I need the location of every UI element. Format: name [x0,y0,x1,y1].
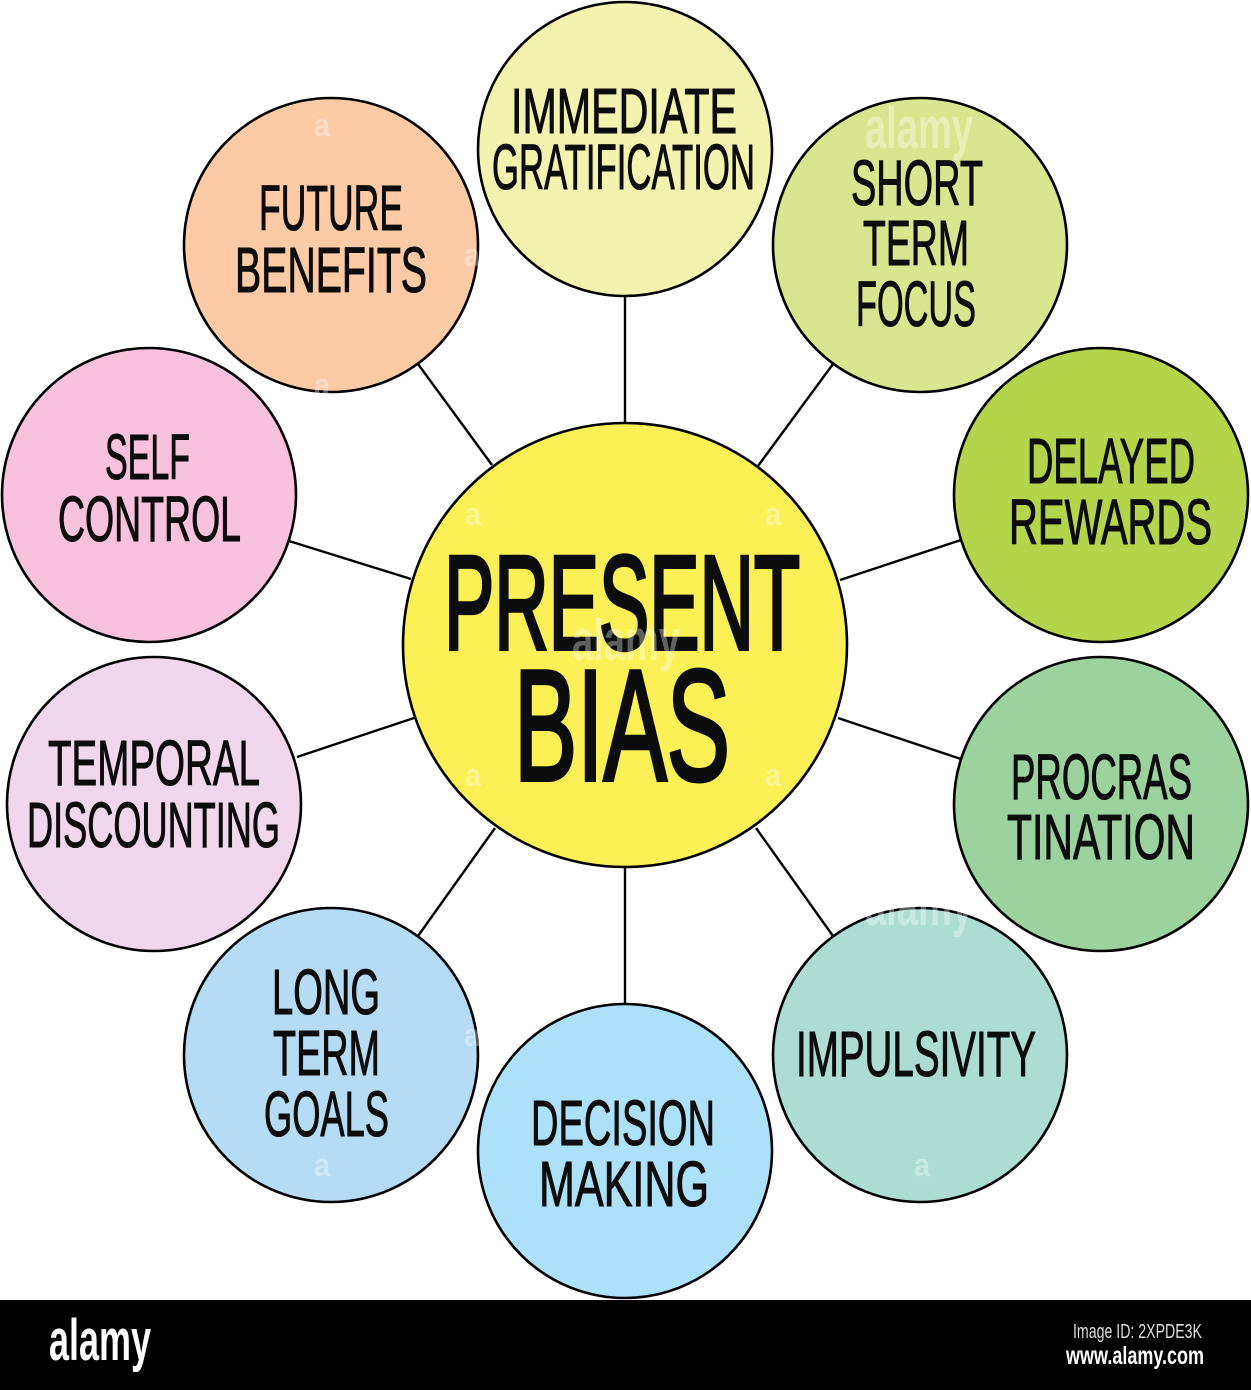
node: self control: SELF [105,421,190,493]
footer bar [0,1300,1251,1390]
watermarks: a [765,496,781,532]
central node: present bias [403,423,847,867]
watermarks: alamy [865,873,973,938]
node: long term goals: TERM [273,1017,380,1089]
watermarks: alamy [865,96,973,161]
node: self control: CONTROL [58,483,241,555]
node: procrastination [954,657,1248,951]
node: delayed rewards [954,348,1248,642]
node: short term focus: FOCUS [856,268,976,340]
node: temporal discounting [7,657,301,951]
node: decision making: DECISION [531,1087,715,1159]
node: temporal discounting: TEMPORAL [48,727,260,799]
node: immediate gratification [478,2,772,296]
watermarks: a [765,757,781,793]
node: long term goals: GOALS [264,1078,389,1150]
node: long term goals: LONG [272,956,380,1028]
watermarks: a [464,237,480,273]
node: future benefits: FUTURE [259,172,403,244]
watermarks: a [314,1147,330,1183]
node: self control [2,348,296,642]
watermarks: alamy [572,608,680,673]
watermarks [314,96,973,1183]
watermarks: a [314,107,330,143]
watermarks: a [314,367,330,403]
node: decision making [478,1004,772,1298]
watermarks: a [465,757,481,793]
node: short term focus: TERM [863,207,969,279]
node: immediate gratification: IMMEDIATE [511,75,737,147]
central node: present bias: BIAS [514,638,730,814]
footer logo: alamy [49,1308,151,1373]
central node: present bias: PRESENT [444,529,800,678]
node: immediate gratification: GRATIFICATION [492,131,755,203]
node: short term focus [773,98,1067,392]
watermarks: a [464,1017,480,1053]
node: temporal discounting: DISCOUNTING [27,789,280,861]
watermarks: a [465,496,481,532]
node: long term goals [184,908,478,1202]
node: impulsivity: IMPULSIVITY [796,1018,1036,1090]
footer image id: Image ID: 2XPDE3K [1073,1321,1202,1343]
connector lines [289,296,961,1004]
watermarks: a [914,1147,930,1183]
node: decision making: MAKING [539,1148,709,1220]
node: future benefits [184,98,478,392]
node: future benefits: BENEFITS [235,234,427,306]
node: short term focus: SHORT [851,147,983,219]
node: impulsivity [773,908,1067,1202]
